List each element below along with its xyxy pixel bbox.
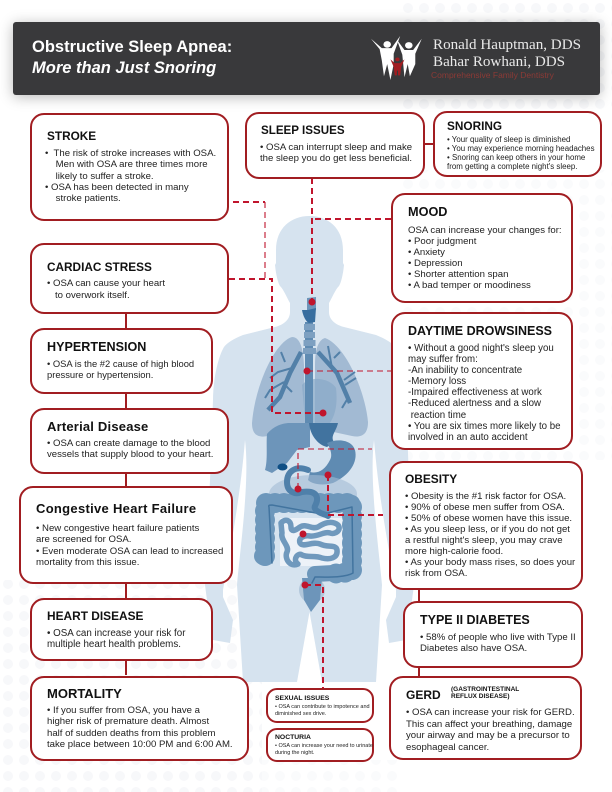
panel: nocturia: during the night. xyxy=(275,750,314,756)
airway xyxy=(265,297,356,424)
panel: mood: OSA can increase your changes for: xyxy=(408,225,562,236)
panel: obesity: risk from OSA. xyxy=(405,568,467,579)
panel: sexual issues: • OSA can contribute to impotence and xyxy=(275,704,370,710)
panel: mortality: • If you suffer from OSA, you have a xyxy=(47,705,200,716)
panel: arterial disease: • OSA can create damage to the blood xyxy=(47,438,210,449)
icon: family logo xyxy=(371,36,422,80)
panel: stroke: STROKE xyxy=(47,129,96,143)
panel: stroke: likely to suffer a stroke. xyxy=(56,171,154,182)
panel: type II diabetes: • 58% of people who live with Type II xyxy=(420,632,576,643)
panel: mood: • Depression xyxy=(408,258,463,269)
panel: obesity: OBESITY xyxy=(405,472,457,486)
panel: arterial disease xyxy=(30,408,229,474)
liver, stomach and esophagus xyxy=(265,423,356,484)
panel: stroke: Men with OSA are three times more xyxy=(56,159,208,170)
intestines xyxy=(254,468,357,612)
panel: cardiac stress: to overwork itself. xyxy=(55,290,130,300)
panel: sleep issues: the sleep you do get less beneficial. xyxy=(260,153,412,164)
panel: obesity xyxy=(389,461,583,590)
dashed connectors xyxy=(229,178,391,688)
panel: GERD: esophageal cancer. xyxy=(406,742,489,752)
panel: mortality: higher risk of premature death. Almost xyxy=(47,716,209,727)
panel: type II diabetes xyxy=(403,601,583,668)
panel: daytime drowsiness: • Without a good night's sleep you xyxy=(408,343,554,354)
organ markers xyxy=(294,298,332,588)
panel: hypertension xyxy=(30,328,213,394)
panel: heart disease xyxy=(30,598,213,661)
panel: type II diabetes: Diabetes also have OSA. xyxy=(420,643,527,654)
panel: arterial disease: vessels that supply blood to your heart. xyxy=(47,449,213,460)
panel: nocturia: • OSA can increase your need to urinate xyxy=(275,743,373,749)
panel: nocturia xyxy=(266,728,374,762)
panel: daytime drowsiness xyxy=(391,312,573,450)
panel: obesity: • As you sleep less, or if you do not get xyxy=(405,524,570,535)
panel: daytime drowsiness: involved in an auto accident xyxy=(408,432,528,443)
solid connectors xyxy=(126,144,433,676)
panel: sexual issues: SEXUAL ISSUES xyxy=(275,695,329,702)
panel: hypertension: HYPERTENSION xyxy=(47,340,146,354)
panel: obesity: • 50% of obese women have this issue. xyxy=(405,513,572,524)
panel: congestive heart failure: Congestive Heart Failure xyxy=(36,501,196,516)
panel: snoring: from getting a complete night's sleep. xyxy=(447,162,577,171)
panel: daytime drowsiness: -An inability to concentrate xyxy=(408,365,522,376)
panel: cardiac stress: • OSA can cause your heart xyxy=(47,278,165,289)
practice names xyxy=(433,37,581,70)
panel: congestive heart failure: mortality from this issue. xyxy=(36,557,139,568)
panel: daytime drowsiness: -Reduced alertness and a slow xyxy=(408,398,541,409)
title: Obstructive Sleep Apnea: xyxy=(32,38,232,56)
panel: obesity: • 90% of obese men suffer from OSA. xyxy=(405,502,565,513)
panel: GERD: GERD xyxy=(406,688,441,702)
panel: daytime drowsiness: -Impaired effectiveness at work xyxy=(408,387,542,398)
panel: heart disease: HEART DISEASE xyxy=(47,609,143,623)
panel: GERD: • OSA can increase your risk for GERD. xyxy=(406,707,575,718)
panel: sleep issues: SLEEP ISSUES xyxy=(261,124,345,137)
panel: snoring: • Your quality of sleep is diminished xyxy=(447,135,570,144)
panel: stroke: • OSA has been detected in many xyxy=(45,182,189,193)
panel: daytime drowsiness: may suffer from: xyxy=(408,354,478,365)
panel: mood xyxy=(391,193,573,303)
panel: GERD: REFLUX DISEASE) xyxy=(451,693,510,700)
panel: sexual issues: diminished sex drive. xyxy=(275,710,326,716)
header banner xyxy=(13,22,600,95)
panel: heart disease: multiple heart health problems. xyxy=(47,639,181,650)
panel: mood: • Shorter attention span xyxy=(408,269,508,280)
title xyxy=(32,38,232,77)
panel: daytime drowsiness: • You are six times more likely to be xyxy=(408,421,561,432)
title: More than Just Snoring xyxy=(32,59,216,77)
panel: snoring: • You may experience morning headaches xyxy=(447,144,595,153)
practice tagline: Comprehensive Family Dentistry xyxy=(431,70,554,80)
panel: congestive heart failure xyxy=(19,486,233,584)
panel: heart disease: • OSA can increase your risk for xyxy=(47,628,185,639)
panel: obesity: • As your body mass rises, so does your xyxy=(405,557,575,568)
panel: sleep issues xyxy=(245,112,425,179)
panel: congestive heart failure: • New congestive heart failure patients xyxy=(36,523,199,534)
panel: congestive heart failure: are screened for OSA. xyxy=(36,534,131,545)
panel: sleep issues: • OSA can interrupt sleep and make xyxy=(260,142,412,153)
panel: cardiac stress xyxy=(30,243,229,314)
panel: sexual issues xyxy=(266,688,374,723)
panel: obesity: • Obesity is the #1 risk factor for OSA. xyxy=(405,491,566,502)
panel: arterial disease: Arterial Disease xyxy=(47,419,148,434)
panel: mood: • A bad temper or moodiness xyxy=(408,280,531,291)
panel: obesity: a restful night's sleep, you may crave xyxy=(405,535,563,546)
panel: stroke: • The risk of stroke increases with OSA. xyxy=(45,148,216,159)
panel: stroke xyxy=(30,113,229,221)
panel: mortality: MORTALITY xyxy=(47,686,122,701)
panel: snoring xyxy=(433,111,602,177)
panel: hypertension: pressure or hypertension. xyxy=(47,369,153,380)
lungs xyxy=(252,337,368,437)
practice names: Bahar Rowhani, DDS xyxy=(433,54,565,70)
panel: mortality: half of sudden deaths from this problem xyxy=(47,728,216,739)
panel: mood: • Poor judgment xyxy=(408,236,476,247)
panel: hypertension: • OSA is the #2 cause of high blood xyxy=(47,358,194,369)
panel: mortality xyxy=(30,676,249,761)
heart xyxy=(302,379,337,428)
panel: obesity: more high-calorie food. xyxy=(405,546,503,557)
panel: congestive heart failure: • Even moderate OSA can lead to increased xyxy=(36,546,223,557)
panel: mortality: take place between 10:00 PM and 6:00 AM. xyxy=(47,739,233,750)
panel: cardiac stress: CARDIAC STRESS xyxy=(47,260,152,274)
panel: GERD xyxy=(389,676,582,760)
panel: mood: MOOD xyxy=(408,205,447,219)
panel: type II diabetes: TYPE II DIABETES xyxy=(420,613,530,627)
panel: nocturia: NOCTURIA xyxy=(275,734,311,741)
human body silhouette xyxy=(205,216,414,682)
panel: GERD: your airway and may be a precursor to xyxy=(406,730,570,741)
panel: GERD: This can affect your breathing, damage xyxy=(406,718,572,730)
panel: mood: • Anxiety xyxy=(408,247,445,258)
panel: GERD: (GASTROINTESTINAL xyxy=(451,686,519,693)
panel: daytime drowsiness: reaction time xyxy=(411,410,466,421)
panel: daytime drowsiness: DAYTIME DROWSINESS xyxy=(408,324,552,338)
panel: daytime drowsiness: -Memory loss xyxy=(408,376,466,387)
practice names: Ronald Hauptman, DDS xyxy=(433,37,581,53)
panel: stroke: stroke patients. xyxy=(56,193,121,204)
panel: snoring: • Snoring can keep others in your home xyxy=(447,153,585,162)
panel: snoring: SNORING xyxy=(447,119,502,133)
